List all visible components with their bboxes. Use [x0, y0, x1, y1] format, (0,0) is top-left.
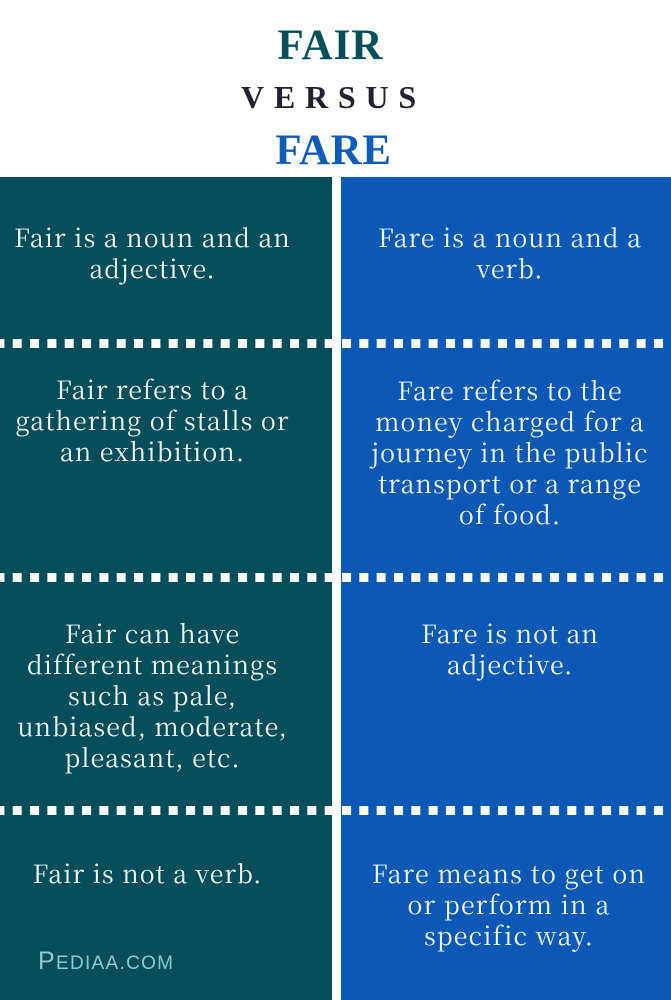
row divider 3 — [0, 806, 664, 815]
text: Fare row 2 — [369, 372, 649, 532]
text: Fair row 2: Fair refers to a — [56, 371, 249, 407]
text: Fare row 1: verb. — [477, 250, 543, 286]
text: Fair row 1: adjective. — [89, 250, 216, 286]
text: Fare row 1 — [378, 219, 642, 286]
text: Fair row 3: such as pale, — [68, 677, 237, 713]
title: versus: VERSUS — [241, 79, 426, 115]
text: Fair row 2: an exhibition. — [60, 433, 245, 469]
text: Fare row 3 — [421, 615, 599, 682]
logo: Pediaa.com: PEDIAA.COM — [38, 947, 174, 975]
text: Fair row 3: unbiased, moderate, — [17, 708, 288, 744]
title: Fair: FAIR — [278, 22, 383, 69]
text: Fair row 1: Fair is a noun and an — [14, 219, 291, 255]
text: Fare row 2: journey in the public — [371, 434, 649, 470]
panel: Fare column background — [341, 177, 671, 1000]
text: Fair row 3 — [17, 615, 288, 775]
text: Fair row 3: Fair can have — [65, 615, 240, 651]
text: Fair row 1 — [14, 219, 291, 286]
text: Fare row 2: Fare refers to the — [397, 372, 623, 408]
row divider 2 — [0, 573, 664, 582]
text: Fare row 3: adjective. — [447, 646, 573, 682]
text: Fair row 3: pleasant, etc. — [64, 739, 241, 775]
text: Fare row 2: money charged for a — [375, 403, 645, 439]
text: Fare row 2: of food. — [459, 496, 561, 532]
panel: Fair column background — [0, 177, 332, 1000]
text: Fair row 2: gathering of stalls or — [16, 402, 289, 438]
text: Fare row 3: Fare is not an — [421, 615, 599, 651]
text: Fare row 2: transport or a range — [378, 465, 642, 501]
text: Fare row 4: or perform in a — [408, 886, 610, 922]
text: Fare row 4 — [372, 855, 646, 953]
text: Fair row 3: different meanings — [27, 646, 278, 682]
text: Fare row 4: Fare means to get on — [372, 855, 646, 891]
text: Fair row 2 — [16, 371, 289, 469]
row divider 1 — [0, 339, 664, 348]
title: Fare: FARE — [275, 127, 392, 174]
text: Fair row 4: Fair is not a verb. — [33, 855, 262, 891]
text: Fare row 1: Fare is a noun and a — [378, 219, 642, 255]
text: Fare row 4: specific way. — [424, 917, 594, 953]
